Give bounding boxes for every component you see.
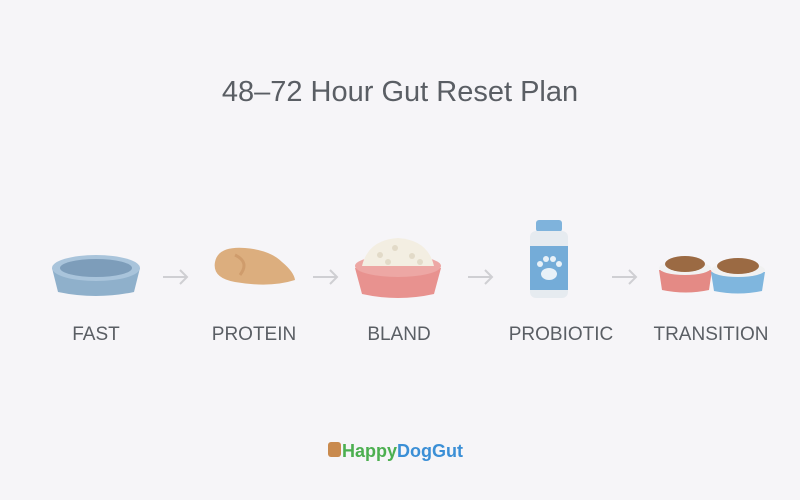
title: 48–72 Hour Gut Reset Plan [222,76,578,108]
labels [72,324,769,345]
labels: BLAND [367,324,431,345]
icon: two kibble bowls [659,256,765,294]
arrow 2 [313,270,337,284]
labels: PROTEIN [212,324,296,345]
icon: chicken [215,248,295,285]
arrow 1 [163,270,187,284]
arrow 3 [468,270,492,284]
icon: rice bowl [355,238,441,298]
labels: PROBIOTIC [509,324,613,345]
labels: TRANSITION [653,324,769,345]
icon: probiotic bottle [530,220,568,298]
labels: FAST [72,324,120,345]
arrow 4 [612,270,636,284]
logo: HappyDogGut [342,441,463,461]
icon: empty bowl [52,255,140,296]
